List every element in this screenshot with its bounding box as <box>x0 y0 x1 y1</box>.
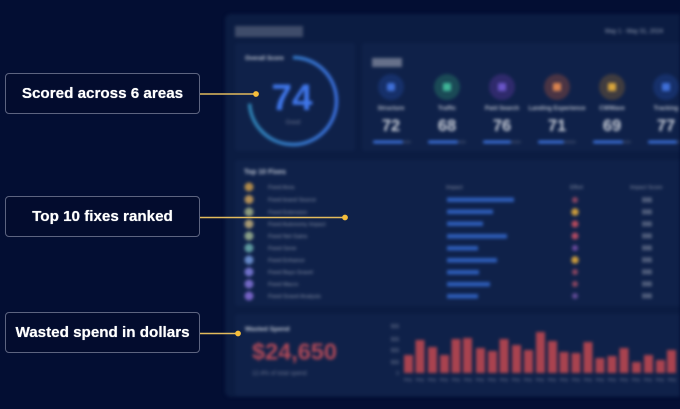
wasted spend heading: Wasted Spend <box>245 326 290 333</box>
category: tracking: 77 <box>657 117 675 135</box>
impact bars <box>447 198 514 298</box>
x axis labels: May <box>668 377 677 382</box>
fix names: Fixed Enhance <box>268 258 305 264</box>
categories heading <box>372 58 402 67</box>
category: creatives <box>593 74 631 144</box>
impact scores: $$$ <box>642 258 653 264</box>
x axis labels: May <box>596 377 605 382</box>
fix names: Fixed Extension <box>268 210 307 216</box>
y axis labels <box>391 324 399 377</box>
effort dots <box>571 197 579 299</box>
x axis labels: May <box>560 377 569 382</box>
impact scores: $$$ <box>642 234 653 240</box>
x axis labels: May <box>548 377 557 382</box>
impact scores: $$$ <box>642 222 653 228</box>
y axis labels: $$$ <box>391 360 399 366</box>
callout: wasted spend in dollars: Wasted spend in dollars <box>15 324 190 341</box>
overall score heading: Overall Score <box>245 56 284 62</box>
fix names: Fixed Net Gains <box>268 234 308 240</box>
category: paid search: 76 <box>493 117 511 135</box>
panel: top 10 fixes <box>235 160 680 306</box>
x axis labels: May <box>632 377 641 382</box>
y axis labels: $$$ <box>391 337 399 343</box>
category: structure: Structure <box>378 106 405 112</box>
fix names: Fixed Bays Gravel <box>268 270 313 276</box>
x axis labels: May <box>524 377 533 382</box>
impact scores: $$$ <box>642 294 653 300</box>
wasted spend value: $24,650 <box>252 338 337 364</box>
category: structure <box>373 74 411 144</box>
bar chart: wasted spend <box>404 332 676 373</box>
x axis labels: May <box>620 377 629 382</box>
x axis labels: May <box>488 377 497 382</box>
category: landing experience: Landing Experience <box>528 106 586 112</box>
rank badges <box>244 195 254 300</box>
callout: scored across 6 areas <box>5 73 200 114</box>
fix names: Fixed Macro <box>268 282 298 288</box>
category: landing experience: 71 <box>548 117 566 135</box>
top 10 heading: Top 10 Fixes <box>244 169 286 176</box>
score rating: Good <box>286 120 300 126</box>
category: creatives: CWWave <box>599 106 625 112</box>
category: paid search <box>483 74 521 144</box>
category: paid search: Paid Search <box>485 106 520 112</box>
score gauge <box>250 58 336 144</box>
panel: category scores <box>362 43 680 151</box>
category: creatives: 69 <box>603 117 621 135</box>
fix names: Fixed Gravel Analysis <box>268 294 321 300</box>
panel: overall score <box>235 43 355 151</box>
wasted spend caption: 12.4% of total spend <box>252 371 307 377</box>
x axis labels: May <box>644 377 653 382</box>
y axis labels: $$$ <box>391 348 399 354</box>
x axis labels: May <box>428 377 437 382</box>
x axis labels: May <box>512 377 521 382</box>
x axis labels: May <box>608 377 617 382</box>
impact scores: $$$ <box>642 282 653 288</box>
score value: 74 <box>271 77 313 118</box>
category: landing experience <box>528 74 586 144</box>
table header: Impact Score <box>630 185 662 191</box>
impact scores: $$$ <box>642 270 653 276</box>
callout: top 10 fixes ranked <box>5 196 200 237</box>
fix names: Fixed Autonomy Impact <box>268 222 326 228</box>
callout: wasted spend in dollars <box>5 312 200 353</box>
y axis labels: 0 <box>396 371 399 377</box>
category: tracking <box>648 74 680 144</box>
x axis labels: May <box>500 377 509 382</box>
table header <box>244 182 662 192</box>
impact scores: $$$ <box>642 198 653 204</box>
fix names: Fixed Gene <box>268 246 296 252</box>
x axis labels <box>404 377 677 382</box>
fix names: Fixed brand Source <box>268 198 316 204</box>
impact scores: $$$ <box>642 246 653 252</box>
callout: scored across 6 areas: Scored across 6 areas <box>22 85 183 102</box>
category: tracking: Tracking <box>654 106 679 112</box>
x axis labels: May <box>464 377 473 382</box>
impact scores <box>642 198 653 300</box>
x axis labels: May <box>452 377 461 382</box>
x axis labels: May <box>404 377 413 382</box>
x axis labels: May <box>572 377 581 382</box>
category: traffic: Traffic <box>438 106 457 112</box>
panel: wasted spend <box>235 314 680 396</box>
category: structure: 72 <box>382 117 400 135</box>
y axis labels: $$$ <box>391 324 399 330</box>
category: traffic: 68 <box>438 117 456 135</box>
dashboard frame <box>225 14 680 397</box>
impact scores: $$$ <box>642 210 653 216</box>
x axis labels: May <box>416 377 425 382</box>
table header: Fixed Area <box>268 185 295 191</box>
x axis labels: May <box>536 377 545 382</box>
table header: Impact <box>446 185 463 191</box>
fix names <box>268 198 326 300</box>
x axis labels: May <box>476 377 485 382</box>
x axis labels: May <box>584 377 593 382</box>
x axis labels: May <box>656 377 665 382</box>
category: traffic <box>428 74 466 144</box>
x axis labels: May <box>440 377 449 382</box>
date range: May 1 - May 31, 2024 <box>605 29 664 35</box>
table header: Effort <box>570 185 584 191</box>
callout: top 10 fixes ranked: Top 10 fixes ranked <box>32 208 173 225</box>
dashboard title <box>235 26 303 37</box>
